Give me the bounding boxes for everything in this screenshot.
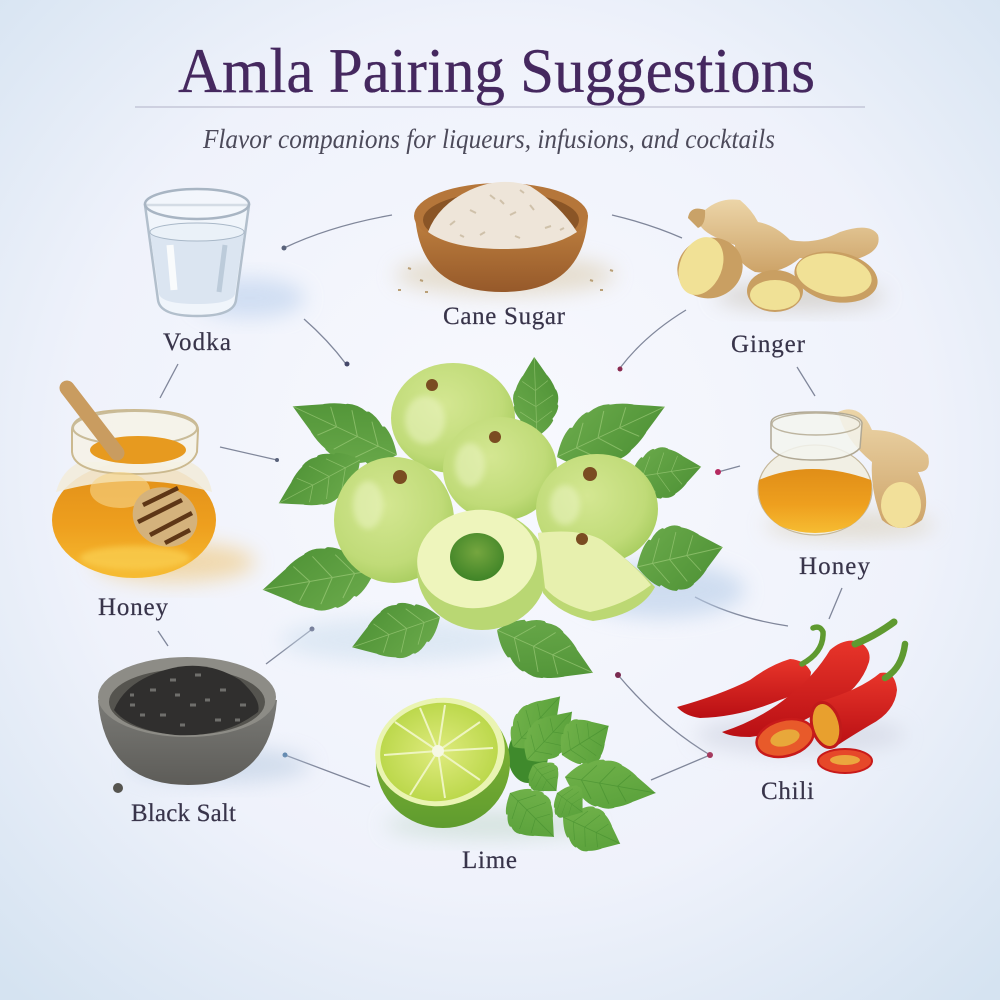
wedge (538, 532, 655, 621)
label: ginger: Ginger (731, 331, 806, 358)
icon: black salt bowl (98, 657, 310, 793)
subtitle: Flavor companions for liqueurs, infusions, and cocktails (202, 124, 775, 154)
mint leaves (493, 683, 660, 864)
icon: ginger root (669, 199, 885, 312)
title: Amla Pairing Suggestions (178, 35, 815, 106)
label: chili: Chili (761, 778, 814, 805)
label: vodka: Vodka (163, 329, 231, 356)
label: black salt: Black Salt (131, 800, 236, 827)
leaves (257, 356, 730, 698)
icon: chili peppers (677, 622, 905, 773)
lime half (368, 689, 512, 828)
label: cane sugar: Cane Sugar (443, 303, 566, 330)
label: honey left: Honey (98, 594, 168, 621)
label: honey right: Honey (799, 553, 870, 580)
cut fruit (411, 502, 547, 630)
fruits (334, 363, 658, 583)
connector lines (158, 215, 842, 787)
icon: amla cluster (257, 356, 745, 698)
icon: honey jar left (52, 388, 255, 582)
icon: lime and mint (368, 683, 660, 864)
icon: honey jar and ginger right (758, 409, 935, 539)
icon: cane sugar bowl (395, 182, 615, 295)
label: lime: Lime (462, 847, 517, 874)
icon: vodka glass (145, 189, 305, 318)
